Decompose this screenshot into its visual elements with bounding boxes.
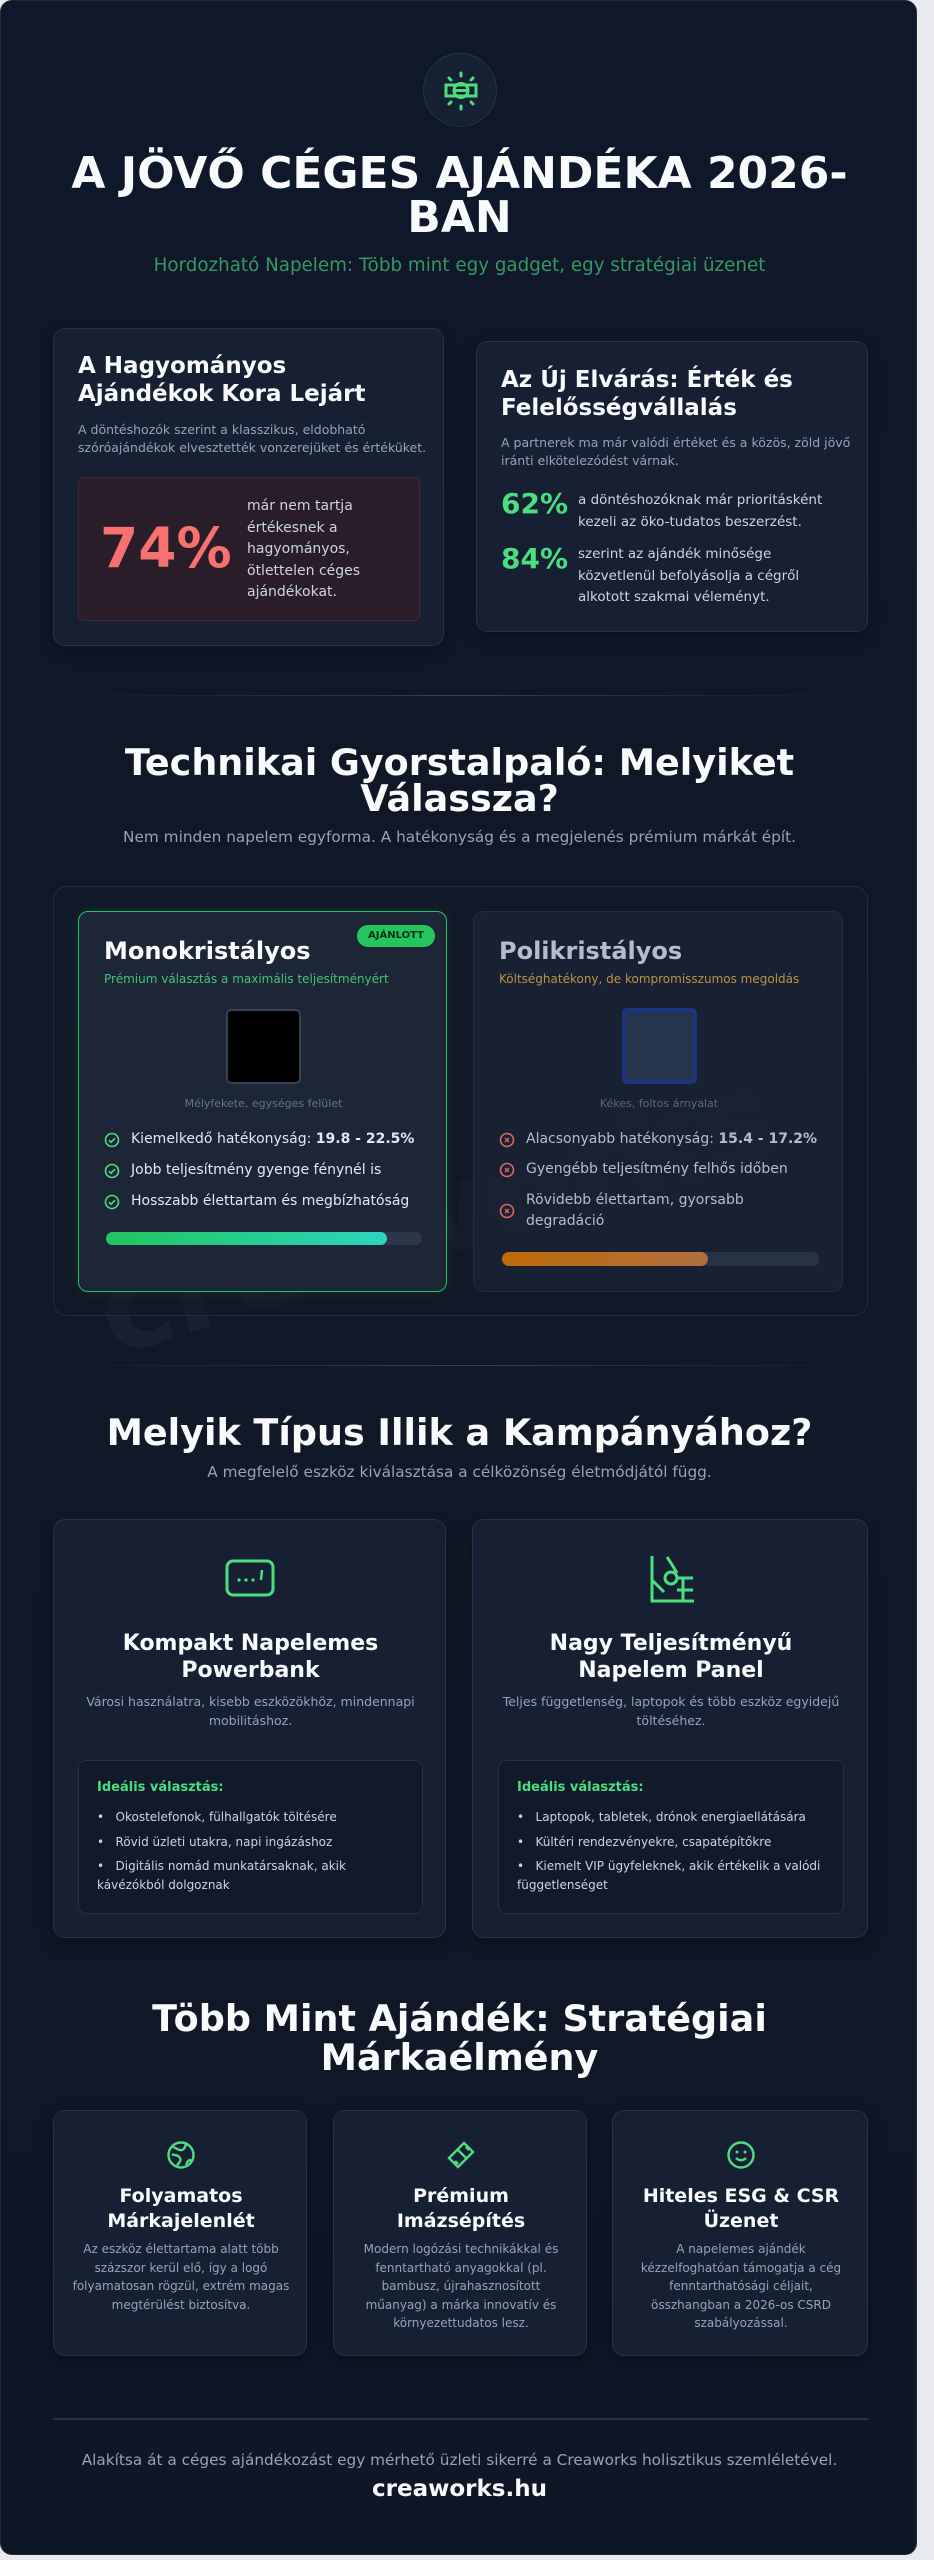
text block: Városi használatra, kisebb eszközökhöz, mindennapi mobilitáshoz. xyxy=(86,1694,415,1728)
progress bar: poly xyxy=(502,1252,819,1266)
caption: Kékes, foltos árnyalat xyxy=(600,1097,718,1110)
callout: 74% xyxy=(78,477,420,621)
heading: strategic: Több Mint Ajándék: Stratégiai xyxy=(152,1997,767,2040)
heading xyxy=(550,1631,792,1683)
feature list: Gyengébb teljesítmény felhős időben xyxy=(526,1161,788,1177)
panel: powerbank xyxy=(53,1519,446,1938)
stat 84%: szerint az ajándék minősége közvetlenül befolyásolja a cégről alkotott szakmai véleményt. xyxy=(578,546,799,605)
badge: AJÁNLOTT xyxy=(368,930,424,941)
icon: header solar badge xyxy=(423,53,497,127)
heading: Hiteles ESG & CSR xyxy=(643,2185,839,2207)
callout: 74%: 74% xyxy=(100,516,232,580)
heading: Kompakt Napelemes xyxy=(123,1631,378,1656)
footer brand: creaworks.hu xyxy=(372,2476,547,2502)
feature list: Jobb teljesítmény gyenge fénynél is xyxy=(131,1162,381,1178)
text block: A döntéshozók szerint a klasszikus, eldobható szóróajándékok elvesztették vonzerejüket és értéküket. xyxy=(78,422,426,455)
panel: ESG xyxy=(612,2110,868,2356)
heading: Napelem Panel xyxy=(578,1658,764,1683)
feature list xyxy=(500,1131,817,1229)
text block: Teljes függetlenség, laptopok és több eszköz egyidejű töltéséhez. xyxy=(503,1694,839,1728)
panel: comparison xyxy=(53,886,868,1316)
text block: A partnerek ma már valódi értéket és a közös, zöld jövő iránti elkötelezódést várnak. xyxy=(501,435,850,468)
panel: brand presence xyxy=(53,2110,307,2356)
text block: A napelemes ajándék kézzelfoghatóan támogatja a cég fenntarthatósági céljait, összhangban a 2026-os CSRD szabályozással. xyxy=(641,2242,841,2330)
heading: technical xyxy=(125,741,794,820)
subheading: Nem minden napelem egyforma. A hatékonyság és a megjelenés prémium márkát épít. xyxy=(123,828,796,846)
heading: Folyamatos xyxy=(119,2185,243,2207)
list: ideal use: • Digitális nomád munkatársaknak, akik kávézókból dolgoznak xyxy=(97,1859,346,1892)
badge xyxy=(357,925,435,947)
heading: Az Új Elvárás: Érték és xyxy=(501,367,793,393)
text block: Modern logózási technikákkal és fenntartható anyagokkal (pl. bambusz, újrahasznosított műanyag) a márka innovatív és környezettudatos lesz. xyxy=(364,2242,558,2330)
footer text: Alakítsa át a céges ajándékozást egy mérhető üzleti sikerré a Creaworks holisztikus szemléletével. xyxy=(82,2451,837,2469)
icon: smile xyxy=(727,2141,755,2169)
list: ideal use xyxy=(498,1760,844,1914)
heading xyxy=(397,2185,525,2232)
card: polycrystalline xyxy=(473,911,843,1292)
heading: Imázsépítés xyxy=(397,2210,525,2232)
heading: Felelősségvállalás xyxy=(501,395,737,421)
subtitle: Prémium választás a maximális teljesítményért xyxy=(104,972,389,986)
heading: Monokristályos xyxy=(104,937,311,965)
heading: Márkajelenlét xyxy=(107,2210,255,2232)
icon: sparkle xyxy=(447,2141,475,2169)
feature list: Rövidebb élettartam, gyorsabb degradáció xyxy=(526,1192,744,1229)
subtitle: Hordozható Napelem: Több mint egy gadget, egy stratégiai üzenet xyxy=(154,255,765,276)
icon: powerbank xyxy=(226,1560,274,1596)
heading: Polikristályos xyxy=(499,937,682,965)
card: monocrystalline xyxy=(78,911,447,1292)
heading: technical: Technikai Gyorstalpaló: Melyiket xyxy=(125,741,794,784)
heading: A Hagyományos xyxy=(78,353,286,379)
subtitle: Költséghatékony, de kompromisszumos megoldás xyxy=(499,972,799,986)
panel: old gifts xyxy=(53,328,444,646)
heading xyxy=(643,2185,839,2232)
caption: Mélyfekete, egységes felület xyxy=(185,1097,342,1110)
feature list: Kiemelkedő hatékonyság: 19.8 - 22.5% xyxy=(131,1131,414,1147)
heading: technical: Válassza? xyxy=(360,777,559,820)
panel: large panel xyxy=(472,1519,868,1938)
icon: blue panel xyxy=(622,1008,697,1084)
list: ideal use: • Rövid üzleti utakra, napi ingázáshoz xyxy=(97,1834,332,1848)
heading xyxy=(501,366,793,421)
stat 84% xyxy=(501,542,799,605)
callout: 74%: már nem tartja értékesnek a hagyományos, ötlettelen céges ajándékokat. xyxy=(247,498,360,600)
text block: Az eszköz élettartama alatt több százszor kerül elő, így a logó folyamatosan rögzül, extrém magas megtérülést biztosítva. xyxy=(73,2242,289,2312)
progress bar: mono xyxy=(106,1232,422,1245)
list: ideal use: • Laptopok, tabletek, drónok energiaellátására xyxy=(517,1810,806,1824)
feature list xyxy=(104,1131,414,1210)
heading: Powerbank xyxy=(181,1658,320,1683)
stat 62% xyxy=(501,487,822,530)
feature list: Alacsonyabb hatékonyság: 15.4 - 17.2% xyxy=(526,1131,817,1147)
watermark: creaworks xyxy=(81,1047,788,1384)
heading: Nagy Teljesítményű xyxy=(550,1631,792,1656)
heading: which type: Melyik Típus Illik a Kampányához? xyxy=(107,1411,812,1454)
list: ideal use: • Okostelefonok, fülhallgatók töltésére xyxy=(97,1810,337,1824)
heading xyxy=(123,1631,378,1683)
list: ideal use: • Kültéri rendezvényekre, csapatépítőkre xyxy=(517,1834,771,1848)
icon: globe xyxy=(167,2141,195,2169)
heading: strategic xyxy=(152,1997,767,2079)
subheading: A megfelelő eszköz kiválasztása a célközönség életmódjától függ. xyxy=(207,1463,712,1481)
stat 84%: 84% xyxy=(501,542,568,575)
title: A JÖVŐ CÉGES AJÁNDÉKA 2026- xyxy=(71,148,848,199)
icon: black panel xyxy=(226,1009,301,1084)
heading: Üzenet xyxy=(704,2210,778,2232)
panel: premium image xyxy=(333,2110,587,2356)
stat 62%: 62% xyxy=(501,487,568,520)
heading xyxy=(107,2185,255,2232)
stat 62%: a döntéshozóknak már prioritásként kezeli az öko-tudatos beszerzést. xyxy=(578,492,822,530)
title xyxy=(71,147,848,243)
list: ideal use xyxy=(78,1760,423,1914)
heading: Ajándékok Kora Lejárt xyxy=(78,381,366,407)
list: ideal use: Ideális választás: xyxy=(517,1780,644,1795)
feature list: Hosszabb élettartam és megbízhatóság xyxy=(131,1193,409,1209)
heading: Prémium xyxy=(413,2185,509,2207)
icon: solar panel xyxy=(650,1556,694,1602)
heading xyxy=(78,353,366,407)
panel: new expectation xyxy=(476,341,868,632)
title: BAN xyxy=(407,192,512,243)
list: ideal use: • Kiemelt VIP ügyfeleknek, akik értékelik a valódi függetlenséget xyxy=(517,1859,820,1892)
list: ideal use: Ideális választás: xyxy=(97,1780,224,1795)
heading: strategic: Márkaélmény xyxy=(321,2036,598,2079)
